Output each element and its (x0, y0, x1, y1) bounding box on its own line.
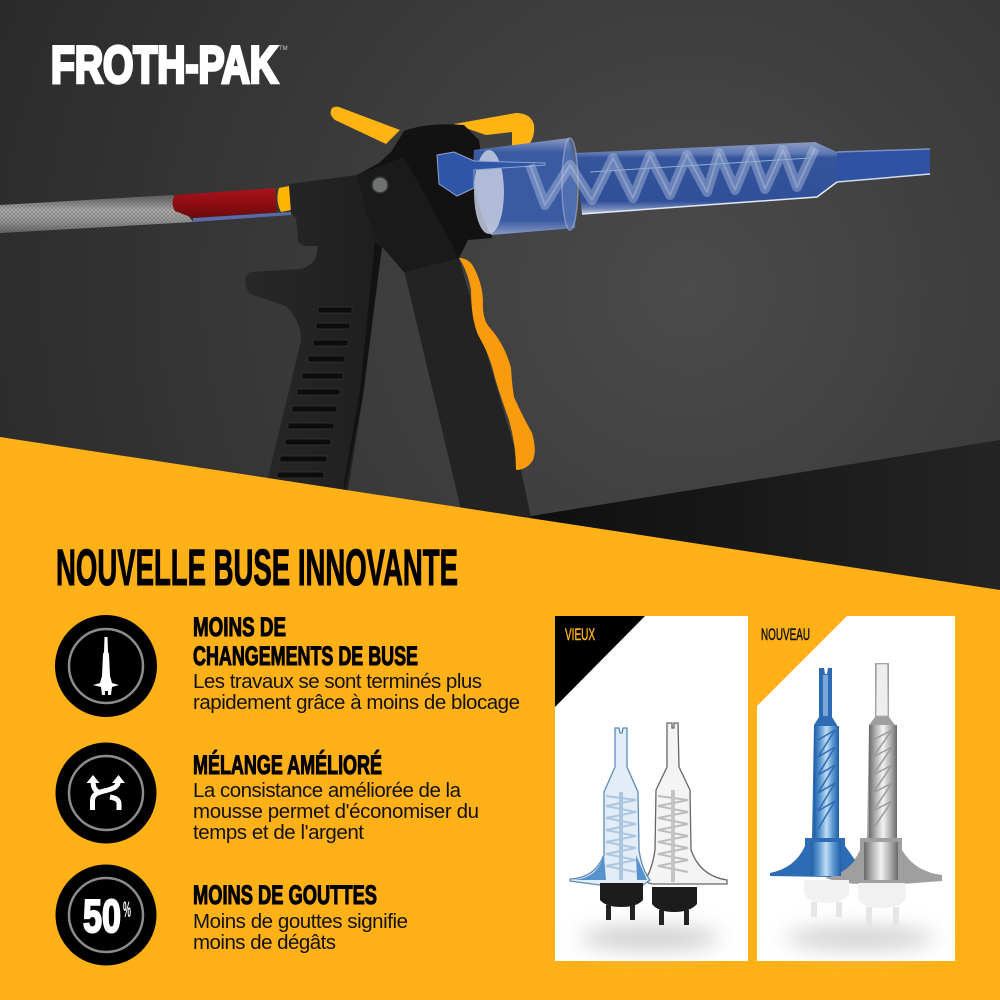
body text: La consistance améliorée de la (193, 779, 462, 802)
body text: Les travaux se sont terminés plus (193, 670, 482, 693)
nozzle tube (575, 142, 837, 214)
subheading: MÉLANGE AMÉLIORÉ (193, 749, 382, 780)
grip slots (277, 307, 352, 478)
yellow left lever (331, 107, 400, 144)
body text line 3: temps et de l'argent (193, 821, 364, 844)
yellow ring (277, 186, 291, 212)
cylinder front rim (562, 138, 578, 230)
floor shadow (580, 926, 720, 950)
gun head (357, 124, 492, 272)
panel: new nozzle (757, 616, 955, 961)
front lever (404, 258, 532, 522)
foam gun (0, 107, 535, 522)
icon: nozzle (55, 615, 157, 717)
braided hose (0, 195, 193, 233)
panel: old nozzle (555, 616, 748, 961)
panel background (757, 616, 955, 961)
corner tag (555, 616, 645, 707)
benefit: improved mixing (56, 742, 479, 844)
body text line 2: moins de dégâts (193, 931, 336, 954)
cylinder glass face (474, 150, 504, 234)
logo wordmark: FROTH-PAK (51, 36, 278, 94)
grip side shade (343, 242, 382, 500)
icon: 50 percent (56, 864, 156, 966)
dark floor wedge (525, 440, 1000, 600)
clear old nozzle (645, 723, 727, 925)
blue collar (437, 152, 545, 196)
transparent blue mixing nozzle (437, 138, 930, 235)
body text: Moins de gouttes signifie (193, 910, 408, 933)
rear grip (245, 175, 382, 520)
body text line 2: mousse permet d'économiser du (193, 800, 479, 823)
tag label: NOUVEAU (761, 625, 810, 644)
orange trigger (459, 258, 535, 470)
logo (51, 36, 288, 94)
benefit: fewer drips (56, 864, 408, 966)
subheading: MOINS DE (193, 612, 286, 642)
helix centre line (590, 158, 810, 172)
tag label: VIEUX (565, 625, 595, 644)
pivot screw (372, 177, 388, 193)
trademark: TM (279, 46, 288, 52)
body text line 2: rapidement grâce à moins de blocage (193, 691, 520, 714)
pivot plate (357, 157, 459, 272)
blue old nozzle (570, 728, 650, 920)
floor shadow (785, 926, 935, 950)
yellow right lever (454, 113, 534, 146)
corner tag (757, 616, 847, 706)
blue hose line (193, 212, 291, 222)
icon: 50 percent: % (123, 897, 131, 922)
icon: crossing arrows (56, 742, 156, 844)
tube highlight (582, 182, 837, 214)
dark background (0, 0, 1000, 600)
internal helix (530, 148, 815, 205)
benefit: fewer nozzle changes (55, 612, 520, 717)
red hose sleeve (172, 188, 277, 218)
outer cylinder (473, 138, 577, 235)
icon: 50 percent: 50 (83, 890, 121, 942)
yellow lower panel (0, 437, 1000, 1000)
main heading: NOUVELLE BUSE INNOVANTE (56, 539, 458, 596)
subheading: MOINS DE GOUTTES (193, 880, 377, 910)
subheading line 2: CHANGEMENTS DE BUSE (193, 641, 418, 671)
panel background (555, 616, 748, 961)
nozzle tip (837, 149, 930, 182)
clear new nozzle (825, 663, 942, 926)
blue new nozzle (770, 668, 855, 917)
